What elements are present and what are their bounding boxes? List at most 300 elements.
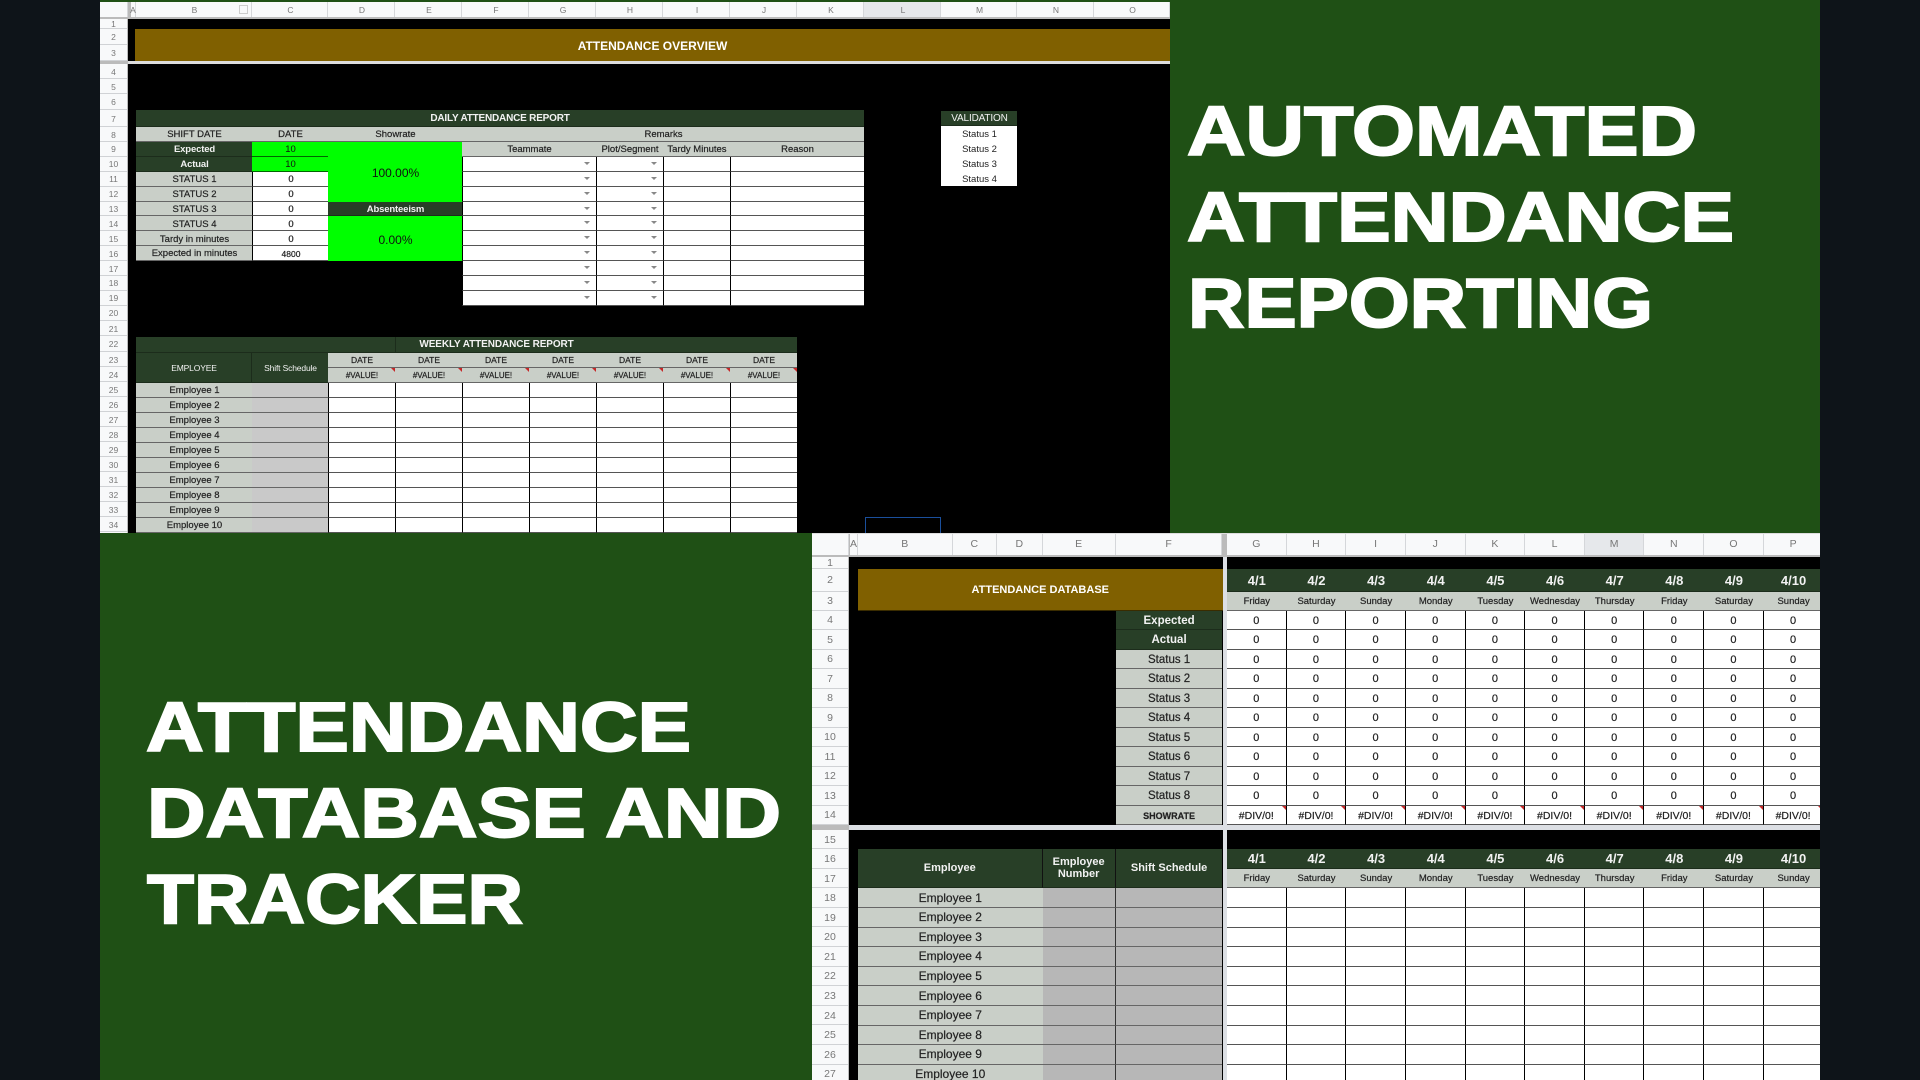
table: daily counts by date: 0 — [1432, 693, 1438, 705]
table: daily counts by date: 0 — [1373, 634, 1379, 646]
table: employee attendance tracker by date — [1227, 849, 1820, 1080]
table: employee roster: Employee 7 — [919, 1008, 982, 1022]
row number column: 28 — [109, 430, 118, 440]
table: daily counts by date: 4/8 — [1665, 573, 1683, 588]
table: weekly attendance report: DATE — [351, 355, 373, 365]
table: daily counts by date: 0 — [1253, 771, 1259, 783]
table: employee roster: Employee 4 — [919, 949, 982, 963]
row number column: 4 — [111, 66, 116, 76]
table: daily attendance report: STATUS 2 — [172, 189, 216, 200]
table: daily counts by date: 0 — [1551, 751, 1558, 763]
column header row: N — [1670, 538, 1678, 550]
row number column: 5 — [827, 634, 833, 646]
row number column: 31 — [109, 475, 118, 485]
table: daily counts by date: #DIV/0! — [1298, 810, 1333, 822]
table: daily counts by date: 0 — [1551, 790, 1558, 802]
table: weekly attendance report: DATE — [753, 355, 775, 365]
heading: attendance database and tracker: ATTENDANCE — [146, 688, 691, 766]
table: daily counts by date: Monday — [1419, 596, 1453, 607]
column header row: M — [1610, 538, 1619, 550]
table: daily counts by date: #DIV/0! — [1358, 810, 1393, 822]
absenteeism label: Absenteeism — [367, 204, 424, 215]
table: employee attendance tracker by date: Sunday — [1777, 873, 1810, 884]
table: weekly attendance report: DATE — [686, 355, 708, 365]
table: daily attendance report: STATUS 1 — [172, 174, 216, 185]
table: daily counts by date: 0 — [1551, 673, 1558, 685]
table: daily counts by date: 4/2 — [1307, 573, 1326, 588]
table: weekly attendance report: #VALUE! — [748, 371, 780, 380]
table: daily counts by date: 0 — [1730, 732, 1736, 744]
table: daily attendance report: Tardy Minutes — [667, 144, 727, 155]
table: weekly attendance report: Employee 5 — [169, 445, 220, 456]
table: daily counts by date: #DIV/0! — [1239, 810, 1274, 822]
table: daily counts by date: 0 — [1432, 751, 1438, 763]
row number column: 12 — [824, 770, 836, 782]
heading: automated attendance reporting — [1187, 92, 1734, 342]
table: daily counts by date: 0 — [1432, 771, 1438, 783]
table: daily attendance report: STATUS 3 — [172, 204, 216, 215]
table: daily attendance report: 0 — [288, 189, 294, 200]
table: employee attendance tracker by date: 4/4 — [1427, 851, 1445, 866]
table: daily counts by date: 0 — [1313, 673, 1319, 685]
table: daily counts by date: 0 — [1253, 654, 1259, 666]
row number column: 34 — [109, 520, 118, 530]
table: daily counts by date: 0 — [1253, 732, 1259, 744]
table: daily attendance report: Tardy in minutes — [160, 234, 229, 245]
table: daily counts by date: 0 — [1671, 771, 1677, 783]
table: employee roster: Employee 8 — [919, 1028, 982, 1042]
table: employee roster: Employee 5 — [919, 969, 982, 983]
table: daily counts by date: 0 — [1432, 673, 1438, 685]
table: daily counts by date: 0 — [1253, 673, 1259, 685]
row number column: 10 — [109, 159, 118, 169]
table: daily attendance report: 10 — [285, 159, 296, 170]
table: daily counts by date: 0 — [1790, 634, 1796, 646]
table: daily counts by date: #DIV/0! — [1477, 810, 1512, 822]
table: daily counts by date: Saturday — [1297, 596, 1335, 607]
table: employee roster: Employee 6 — [919, 989, 982, 1003]
table: weekly attendance report: DATE — [485, 355, 507, 365]
table: validation list: Status 3 — [962, 159, 997, 170]
row number column: 25 — [109, 385, 118, 395]
table: daily counts by date: 0 — [1492, 654, 1498, 666]
table: daily attendance report: 10 — [285, 144, 296, 155]
column header row: C — [970, 538, 978, 550]
row number column: 16 — [824, 853, 836, 865]
column header row: E — [1075, 538, 1082, 550]
metric labels column: Status 5 — [1148, 732, 1190, 744]
table: weekly attendance report: #VALUE! — [413, 371, 445, 380]
heading: attendance database and tracker: DATABASE AND — [147, 774, 781, 852]
table: daily attendance report: 0 — [288, 234, 294, 245]
panel: bottom left green title — [100, 533, 812, 1080]
column header row: K — [828, 4, 834, 14]
table: daily attendance report: Teammate — [507, 144, 552, 155]
row number column: 18 — [824, 892, 836, 904]
heading: daily attendance report — [136, 110, 864, 127]
table: daily counts by date: 0 — [1611, 634, 1617, 646]
absenteeism value — [328, 216, 462, 261]
table: daily counts by date: 0 — [1790, 790, 1796, 802]
table: daily counts by date: 0 — [1373, 693, 1379, 705]
metric labels column — [1116, 611, 1222, 825]
row number column: 33 — [109, 505, 118, 515]
table: daily counts by date: 0 — [1551, 693, 1558, 705]
row number column: 25 — [824, 1029, 836, 1041]
table: daily counts by date: Tuesday — [1477, 596, 1513, 607]
row number column: 15 — [109, 234, 118, 244]
table: daily counts by date: 0 — [1551, 732, 1558, 744]
row number column: 22 — [824, 970, 836, 982]
table: daily counts by date: 0 — [1730, 771, 1736, 783]
table: daily counts by date: 0 — [1492, 693, 1498, 705]
table: daily counts by date: 0 — [1671, 712, 1677, 724]
table: daily attendance report: STATUS 4 — [172, 219, 216, 230]
table: employee roster: Employee — [1053, 856, 1105, 868]
table: daily counts by date: 0 — [1611, 751, 1617, 763]
selected cell outline — [865, 517, 941, 537]
table: weekly attendance report: Employee 7 — [169, 475, 220, 486]
table: validation list: Status 1 — [962, 129, 997, 140]
panel: attendance database spreadsheet — [812, 533, 1820, 1080]
table: employee attendance tracker by date: Monday — [1419, 873, 1453, 884]
column header row: M — [976, 4, 983, 14]
table: daily counts by date: 4/1 — [1248, 573, 1266, 588]
table: employee attendance tracker by date: Wednesday — [1530, 873, 1580, 884]
metric labels column: Status 2 — [1148, 673, 1190, 685]
table: employee roster: Number — [1058, 868, 1099, 880]
table: validation list: Status 2 — [962, 144, 997, 155]
row number column: 1 — [827, 557, 833, 569]
table: daily counts by date: 0 — [1253, 712, 1259, 724]
table: weekly attendance report: DATE — [552, 355, 574, 365]
table: daily counts by date: 0 — [1790, 654, 1796, 666]
metric labels column: Status 6 — [1148, 751, 1190, 763]
table: employee roster: Employee 2 — [919, 910, 982, 924]
table: daily counts by date: #DIV/0! — [1656, 810, 1691, 822]
table: daily counts by date: 0 — [1611, 771, 1617, 783]
table: daily counts by date: 4/5 — [1486, 573, 1504, 588]
table: daily counts by date: 0 — [1492, 771, 1498, 783]
table: daily counts by date: 0 — [1373, 732, 1379, 744]
table: daily counts by date: 0 — [1551, 654, 1558, 666]
row number column: 20 — [824, 931, 836, 943]
table: daily attendance report: Actual — [180, 159, 209, 170]
heading: automated attendance reporting: ATTENDANCE — [1187, 178, 1734, 256]
table: daily counts by date: 0 — [1730, 693, 1736, 705]
table: daily counts by date: 0 — [1492, 790, 1498, 802]
heading: daily attendance report: DAILY ATTENDANCE REPORT — [430, 113, 570, 124]
row number column: 23 — [109, 355, 118, 365]
row number column: 21 — [824, 951, 836, 963]
table: daily counts by date: 0 — [1492, 615, 1498, 627]
column header row: D — [1015, 538, 1023, 550]
table: daily counts by date: #DIV/0! — [1776, 810, 1811, 822]
table: daily counts by date: 0 — [1671, 693, 1677, 705]
row number column: 6 — [111, 97, 116, 107]
table: employee attendance tracker by date: Friday — [1661, 873, 1688, 884]
row number column: 6 — [827, 653, 833, 665]
heading: attendance database and tracker: TRACKER — [147, 860, 523, 938]
table: daily counts by date: 4/4 — [1427, 573, 1445, 588]
panel: top right green title — [1170, 0, 1820, 533]
table: daily counts by date: 0 — [1671, 673, 1677, 685]
table: daily counts by date: 0 — [1432, 732, 1438, 744]
row number column: 26 — [824, 1049, 836, 1061]
showrate value: 100.00% — [372, 166, 419, 180]
table: daily attendance report: Remarks — [644, 129, 682, 140]
table: weekly attendance report: Employee 10 — [167, 520, 222, 531]
table: daily counts by date: 0 — [1671, 732, 1677, 744]
table: employee attendance tracker by date: Friday — [1244, 873, 1270, 884]
table: daily counts by date: 0 — [1730, 615, 1736, 627]
table: daily counts by date: #DIV/0! — [1716, 810, 1751, 822]
row number column — [812, 557, 849, 1080]
table: daily counts by date: 4/7 — [1606, 573, 1624, 588]
table: daily counts by date — [1227, 569, 1820, 825]
table: daily attendance report: 0 — [288, 204, 294, 215]
table: daily counts by date: 0 — [1313, 790, 1319, 802]
row number column: 30 — [109, 460, 118, 470]
table: weekly attendance report: EMPLOYEE — [171, 363, 217, 373]
metric labels column: Expected — [1144, 615, 1195, 627]
table: daily counts by date: 0 — [1730, 712, 1736, 724]
table: daily counts by date: 0 — [1730, 634, 1736, 646]
table: daily counts by date: 0 — [1253, 634, 1259, 646]
column header row: N — [1053, 4, 1059, 14]
table: daily counts by date: 0 — [1671, 615, 1677, 627]
column header row: G — [560, 4, 566, 14]
column header row: I — [696, 4, 698, 14]
row number column: 19 — [824, 912, 836, 924]
table: weekly attendance report: #VALUE! — [547, 371, 579, 380]
table: daily counts by date: 0 — [1432, 790, 1438, 802]
metric labels column: Actual — [1152, 634, 1187, 646]
row number column: 14 — [824, 809, 836, 821]
table: daily counts by date: 0 — [1432, 634, 1438, 646]
column header row: D — [359, 4, 365, 14]
table: employee attendance tracker by date: Saturday — [1715, 873, 1753, 884]
table: daily counts by date: 0 — [1790, 732, 1796, 744]
row number column: 9 — [111, 144, 116, 154]
table: weekly attendance report: #VALUE! — [480, 371, 512, 380]
table: daily counts by date: 0 — [1492, 673, 1498, 685]
table: employee roster: Employee 3 — [919, 930, 982, 944]
table: daily counts by date: 0 — [1551, 712, 1558, 724]
row number column: 18 — [109, 278, 118, 288]
table: daily counts by date: 0 — [1373, 615, 1379, 627]
row number column: 24 — [824, 1010, 836, 1022]
row number column: 17 — [109, 264, 118, 274]
table: daily counts by date: Sunday — [1360, 596, 1392, 607]
heading: automated attendance reporting: REPORTING — [1188, 264, 1653, 342]
table: daily counts by date: 4/10 — [1781, 573, 1806, 588]
table: weekly attendance report: Employee 8 — [169, 490, 220, 501]
absenteeism label — [328, 202, 462, 216]
table: weekly attendance report: #VALUE! — [681, 371, 713, 380]
table: daily counts by date: 0 — [1790, 712, 1796, 724]
table: daily counts by date: Wednesday — [1530, 596, 1580, 607]
freeze divider — [1222, 557, 1227, 1080]
table: employee attendance tracker by date: 4/3 — [1367, 851, 1385, 866]
row number column: 15 — [824, 834, 836, 846]
table: daily counts by date: 0 — [1790, 751, 1796, 763]
table: daily counts by date: 0 — [1730, 790, 1736, 802]
table: daily counts by date: 0 — [1611, 790, 1617, 802]
table: weekly attendance report: Employee 2 — [169, 400, 220, 411]
table: daily counts by date: 4/6 — [1546, 573, 1564, 588]
row number column: 1 — [111, 19, 116, 29]
table: employee roster: Employee 1 — [919, 891, 982, 905]
row number column: 17 — [824, 873, 836, 885]
row number column: 27 — [109, 415, 118, 425]
table: daily attendance report: Expected in minutes — [152, 248, 237, 259]
table: daily counts by date: 0 — [1671, 790, 1677, 802]
table: employee attendance tracker by date: 4/10 — [1781, 851, 1806, 866]
metric labels column: Status 4 — [1148, 712, 1190, 724]
column header row — [100, 2, 1170, 19]
table: daily counts by date: 0 — [1492, 634, 1498, 646]
table: weekly attendance report: DATE — [619, 355, 641, 365]
row number column: 3 — [827, 595, 833, 607]
row number column: 24 — [109, 370, 118, 380]
table: daily counts by date: 4/3 — [1367, 573, 1385, 588]
column header row: F — [1165, 538, 1172, 550]
row number column: 2 — [111, 32, 116, 42]
absenteeism value: 0.00% — [378, 233, 413, 247]
heading: automated attendance reporting: AUTOMATED — [1187, 92, 1697, 170]
title banner: attendance overview — [135, 29, 1170, 61]
table: daily counts by date: 0 — [1611, 732, 1617, 744]
table: daily counts by date: 0 — [1790, 693, 1796, 705]
column header row: G — [1252, 538, 1260, 550]
row number column: 12 — [109, 189, 118, 199]
table: daily counts by date: Friday — [1661, 596, 1688, 607]
table: daily counts by date: 0 — [1492, 732, 1498, 744]
table: daily counts by date: 0 — [1611, 693, 1617, 705]
column header row: J — [762, 4, 766, 14]
table: daily counts by date: 0 — [1253, 615, 1259, 627]
table: weekly attendance report: Employee 1 — [169, 385, 220, 396]
table: daily counts by date: 0 — [1313, 732, 1319, 744]
row number column: 14 — [109, 219, 118, 229]
table: employee roster: Shift Schedule — [1131, 862, 1207, 874]
table: daily counts by date: #DIV/0! — [1418, 810, 1453, 822]
table: employee attendance tracker by date: 4/8 — [1665, 851, 1683, 866]
row number column: 7 — [827, 673, 833, 685]
row number column: 8 — [111, 130, 116, 140]
table: daily counts by date: 0 — [1730, 673, 1736, 685]
table: daily attendance report: SHIFT DATE — [167, 129, 222, 140]
row number column: 3 — [111, 48, 116, 58]
row number column: 7 — [111, 114, 116, 124]
column header row: O — [1729, 538, 1738, 550]
table: weekly attendance report: #VALUE! — [614, 371, 646, 380]
metric labels column: Status 7 — [1148, 771, 1190, 783]
metric labels column: SHOWRATE — [1143, 811, 1195, 821]
table: daily counts by date: 0 — [1432, 712, 1438, 724]
row number column: 9 — [827, 712, 833, 724]
row number column: 2 — [827, 574, 833, 586]
table: employee roster: Employee — [924, 862, 976, 874]
column header row: F — [493, 4, 499, 14]
table: daily attendance report: Reason — [781, 144, 814, 155]
panel: attendance overview spreadsheet — [100, 0, 1170, 533]
row number column: 16 — [109, 249, 118, 259]
column header row: C — [287, 4, 294, 14]
title banner: attendance database — [858, 569, 1222, 611]
row number column — [100, 19, 128, 533]
table: employee attendance tracker by date: 4/9 — [1725, 851, 1743, 866]
table: daily counts by date: Saturday — [1715, 596, 1753, 607]
row number column: 19 — [109, 293, 118, 303]
table: daily counts by date: 0 — [1730, 654, 1736, 666]
column header row: I — [1374, 538, 1377, 550]
table: weekly attendance report: DATE — [418, 355, 440, 365]
table: daily counts by date: 0 — [1790, 673, 1796, 685]
table: daily counts by date: 0 — [1373, 771, 1379, 783]
row number column: 11 — [109, 174, 118, 184]
table: weekly attendance report: Employee 6 — [169, 460, 220, 471]
table: employee attendance tracker by date: 4/5 — [1486, 851, 1504, 866]
table: daily counts by date: 0 — [1790, 615, 1796, 627]
table: employee attendance tracker by date: Tuesday — [1477, 873, 1513, 884]
table: daily counts by date: 0 — [1611, 615, 1617, 627]
row number column: 11 — [825, 751, 835, 763]
table: daily counts by date: 0 — [1492, 751, 1498, 763]
table: daily counts by date: 0 — [1253, 751, 1259, 763]
table: daily counts by date: 0 — [1373, 790, 1379, 802]
table: daily counts by date: 0 — [1313, 634, 1319, 646]
table: daily counts by date: 0 — [1313, 654, 1319, 666]
metric labels column: Status 8 — [1148, 790, 1190, 802]
table: validation list: Status 4 — [962, 174, 997, 185]
table: weekly attendance report: Employee 4 — [169, 430, 220, 441]
table: employee roster: Employee 9 — [919, 1047, 982, 1061]
column header row: P — [1790, 538, 1797, 550]
table: employee roster — [858, 849, 1222, 1080]
table: daily counts by date: 0 — [1373, 751, 1379, 763]
row number column: 4 — [827, 614, 833, 626]
table: weekly attendance report: WEEKLY ATTENDANCE REPORT — [419, 339, 574, 350]
column header row: L — [1552, 538, 1557, 550]
table: weekly attendance report: Employee 9 — [169, 505, 220, 516]
row number column: 13 — [824, 790, 836, 802]
table: daily counts by date: 0 — [1313, 712, 1319, 724]
column header row: K — [1491, 538, 1498, 550]
table: daily counts by date: 0 — [1432, 615, 1438, 627]
table: weekly attendance report: Employee 3 — [169, 415, 220, 426]
table: daily counts by date: 0 — [1313, 771, 1319, 783]
column header row: A — [130, 4, 136, 14]
row number column: 8 — [827, 692, 833, 704]
table: employee attendance tracker by date: Sunday — [1360, 873, 1392, 884]
table: daily attendance report: Expected — [174, 144, 215, 155]
table: validation list — [941, 111, 1017, 186]
column header row: H — [627, 4, 633, 14]
table: daily counts by date: 0 — [1671, 654, 1677, 666]
table: employee attendance tracker by date: 4/6 — [1546, 851, 1564, 866]
table: daily attendance report — [136, 127, 864, 306]
row number column: 21 — [109, 324, 118, 334]
table: validation list: VALIDATION — [951, 113, 1008, 124]
column header row: B — [192, 4, 197, 14]
table: daily counts by date: 0 — [1611, 673, 1617, 685]
table: daily counts by date: #DIV/0! — [1597, 810, 1632, 822]
table: daily counts by date: 0 — [1492, 712, 1498, 724]
column header row: L — [901, 4, 905, 14]
row number column: 10 — [824, 731, 836, 743]
